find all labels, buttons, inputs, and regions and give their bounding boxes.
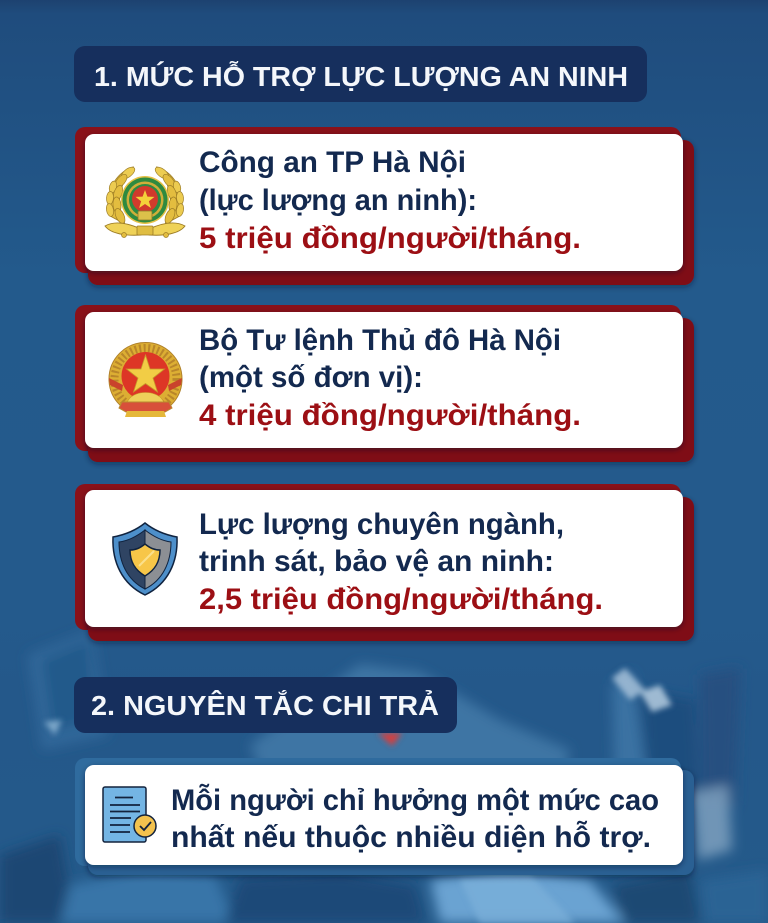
icon: shield — [113, 523, 177, 595]
panel: Công an TP Hà Nội: (lực lượng an ninh): — [199, 184, 477, 217]
heading: section 2 — [74, 677, 457, 733]
panel: Lực lượng chuyên ngành: 2,5 triệu đồng/người/tháng. — [199, 583, 603, 616]
panel: nguyên tắc chi trả: nhất nếu thuộc nhiều diện hỗ trợ. — [171, 820, 651, 854]
heading: section 2: 2. NGUYÊN TẮC CHI TRẢ — [91, 689, 439, 721]
panel: Bộ Tư lệnh Thủ đô Hà Nội: (một số đơn vị): — [199, 361, 423, 394]
panel: Công an TP Hà Nội: 5 triệu đồng/người/tháng. — [199, 222, 581, 255]
panel: Công an TP Hà Nội — [75, 127, 694, 285]
panel: nguyên tắc chi trả: Mỗi người chỉ hưởng một mức cao — [171, 783, 659, 817]
panel: Bộ Tư lệnh Thủ đô Hà Nội: 4 triệu đồng/người/tháng. — [199, 399, 581, 432]
panel: Lực lượng chuyên ngành: trinh sát, bảo vệ an ninh: — [199, 545, 554, 578]
icon: police badge — [105, 165, 185, 238]
panel: Lực lượng chuyên ngành — [75, 484, 694, 641]
panel: Bộ Tư lệnh Thủ đô Hà Nội — [75, 305, 694, 462]
icon: national emblem — [109, 342, 182, 417]
panel: nguyên tắc chi trả — [75, 758, 694, 875]
heading: section 1: 1. MỨC HỖ TRỢ LỰC LƯỢNG AN NINH — [94, 61, 628, 92]
panel: Lực lượng chuyên ngành: Lực lượng chuyên ngành, — [199, 508, 564, 541]
panel: Công an TP Hà Nội: Công an TP Hà Nội — [199, 146, 466, 179]
heading: section 1 — [74, 46, 647, 102]
panel: Bộ Tư lệnh Thủ đô Hà Nội: Bộ Tư lệnh Thủ đô Hà Nội — [199, 324, 561, 357]
icon: document with check — [103, 787, 156, 842]
